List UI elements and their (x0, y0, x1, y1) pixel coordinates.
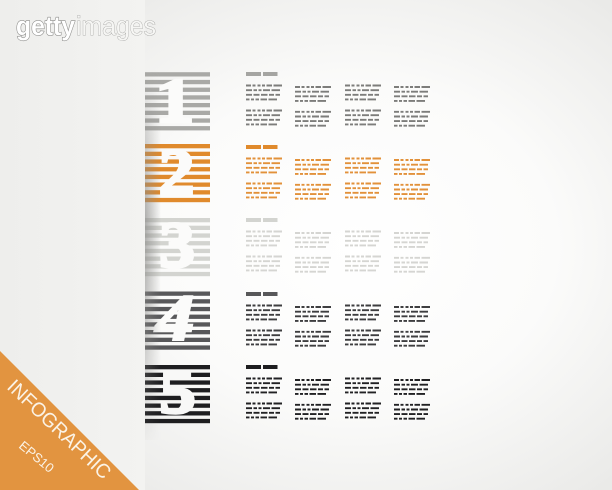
number 5: 5 (159, 356, 196, 427)
corner banner (0, 351, 139, 490)
row 1: grey (145, 65, 430, 136)
row 3: light grey (145, 209, 430, 282)
number 1: 1 (155, 65, 194, 136)
text block 4 (246, 292, 430, 346)
logo word: images: images (76, 11, 156, 41)
panel edge shadow (145, 84, 160, 428)
row 4: dark grey (145, 282, 430, 355)
number 2: 2 (158, 136, 195, 209)
number 4: 4 (154, 282, 194, 355)
banner subtitle: EPS10 (16, 438, 57, 476)
stripes 4 (145, 292, 210, 350)
row 5: black (145, 356, 430, 427)
left panel (0, 0, 145, 490)
text block 2 (246, 145, 430, 199)
number 3: 3 (159, 209, 195, 282)
text block 3 (246, 218, 430, 272)
orange triangle (0, 351, 139, 490)
stripes 2 (145, 144, 210, 202)
banner title: INFOGRAPHIC (3, 376, 115, 484)
row 2: orange (145, 136, 430, 209)
text block 5 (246, 365, 430, 419)
stripes 3 (145, 218, 210, 276)
text block 1 (246, 72, 430, 126)
stripes 1 (145, 72, 210, 130)
stripes 5 (145, 365, 210, 423)
logo word: getty: getty (16, 11, 75, 41)
watermark logo (16, 11, 156, 41)
